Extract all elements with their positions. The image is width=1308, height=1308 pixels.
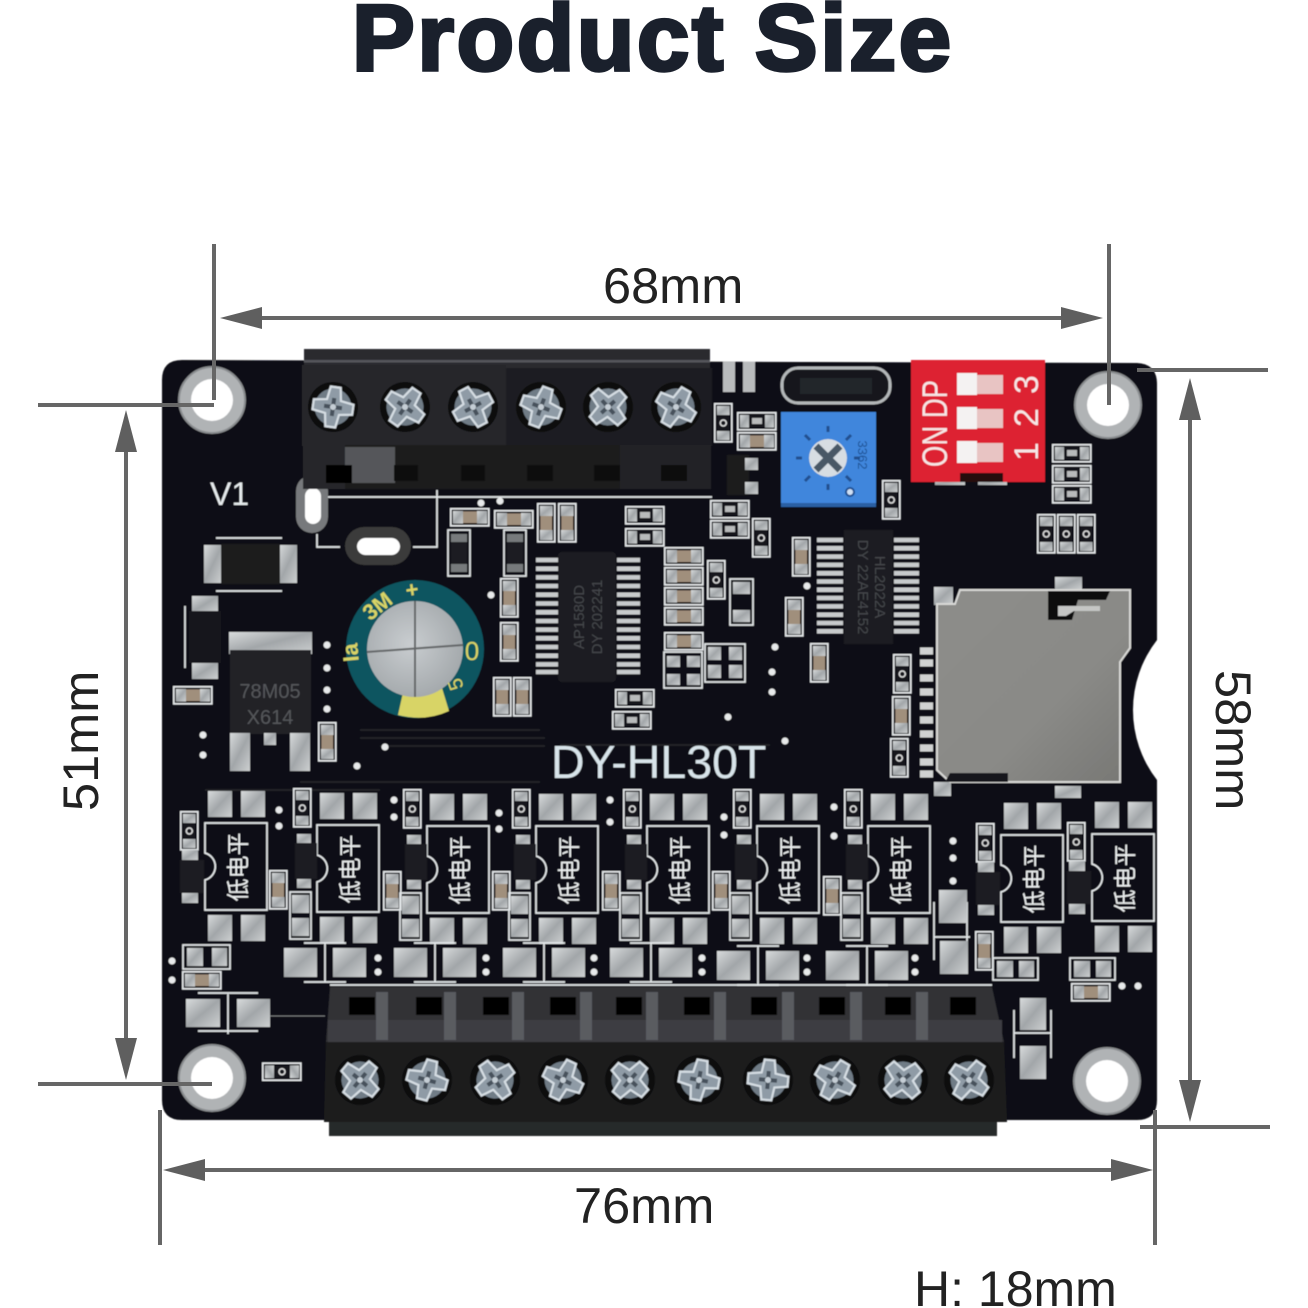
red DIP switch: 2 (1008, 408, 1046, 427)
capacitor: 5 (444, 675, 469, 693)
pcb board (162, 349, 1157, 1136)
module 7 (841, 790, 930, 944)
red DIP switch: 1 (1008, 442, 1046, 461)
dimension 58mm (1137, 370, 1270, 1127)
dimension 68mm: 68mm (603, 257, 743, 314)
board outline (162, 360, 1157, 1120)
switch slider 2 (957, 407, 1003, 429)
module 6: 低电平 (777, 836, 803, 904)
module 8: 低电平 (1021, 844, 1047, 914)
board name: DY-HL30T (551, 736, 766, 788)
dimension 68mm (214, 244, 1109, 405)
small SMD components (174, 362, 1095, 777)
module 9 (1067, 802, 1154, 952)
capacitor: + (404, 576, 420, 603)
top terminal block (302, 349, 712, 489)
module 1: 低电平 (225, 832, 251, 902)
dimension 51mm (38, 405, 214, 1084)
capacitor: 0 (465, 636, 479, 666)
switch slider 3 (957, 373, 1003, 395)
board label V1: V1 (210, 476, 249, 512)
regulator 78M05 (229, 632, 312, 771)
module 5 (620, 790, 730, 944)
red DIP switch (911, 360, 1046, 485)
module 3 (400, 790, 510, 944)
top screws (305, 372, 710, 442)
bottom screws (325, 1045, 1004, 1115)
bottom terminal block (324, 985, 1007, 1136)
module 6 (730, 790, 841, 944)
lower corner solder pads (183, 890, 1115, 1080)
module 4: 低电平 (556, 836, 582, 904)
mounting slots (296, 475, 411, 565)
capacitor: Ia (337, 642, 364, 663)
IC AP1580D (536, 552, 640, 682)
blue potentiometer: 3362 (855, 441, 870, 469)
via dots (168, 498, 1142, 990)
module 9: 低电平 (1112, 844, 1138, 912)
diode D1 (204, 538, 297, 591)
IC HL2022A: DY 22AE4152 (854, 540, 871, 634)
IC HL2022A (817, 530, 919, 644)
silkscreen traces (205, 490, 770, 1016)
red DIP switch: ON DP (916, 380, 955, 467)
module 3: 低电平 (447, 836, 473, 904)
dimension 76mm: 76mm (574, 1177, 714, 1234)
red DIP switch: 3 (1008, 375, 1046, 394)
module 2 (290, 789, 401, 943)
mounting holes (179, 367, 1141, 1114)
module 1 (180, 791, 287, 941)
module 8 (976, 803, 1063, 953)
switch slider 1 (957, 441, 1003, 463)
capacitor: 3M (358, 587, 397, 625)
regulator 78M05: 78M05 (239, 681, 301, 703)
IC HL2022A: HL2022A (871, 556, 888, 618)
module 7: 低电平 (888, 836, 914, 904)
dimension 76mm (160, 1110, 1155, 1245)
capacitor (337, 576, 484, 718)
large solder pad row (284, 943, 908, 985)
diode D2 (185, 596, 221, 679)
regulator 78M05: X614 (247, 707, 293, 729)
micro USB connector (782, 368, 890, 403)
low level output modules (180, 789, 1154, 953)
module 4 (509, 790, 620, 944)
dimension 51mm: 51mm (52, 671, 109, 811)
module 2: 低电平 (337, 834, 363, 904)
blue potentiometer (781, 412, 876, 507)
IC AP1580D: DY 202241 (589, 580, 606, 654)
micro SD card slot (920, 577, 1130, 798)
IC AP1580D: AP1580D (571, 585, 588, 649)
dimension 58mm: 58mm (1205, 670, 1262, 810)
module 5: 低电平 (667, 836, 693, 904)
